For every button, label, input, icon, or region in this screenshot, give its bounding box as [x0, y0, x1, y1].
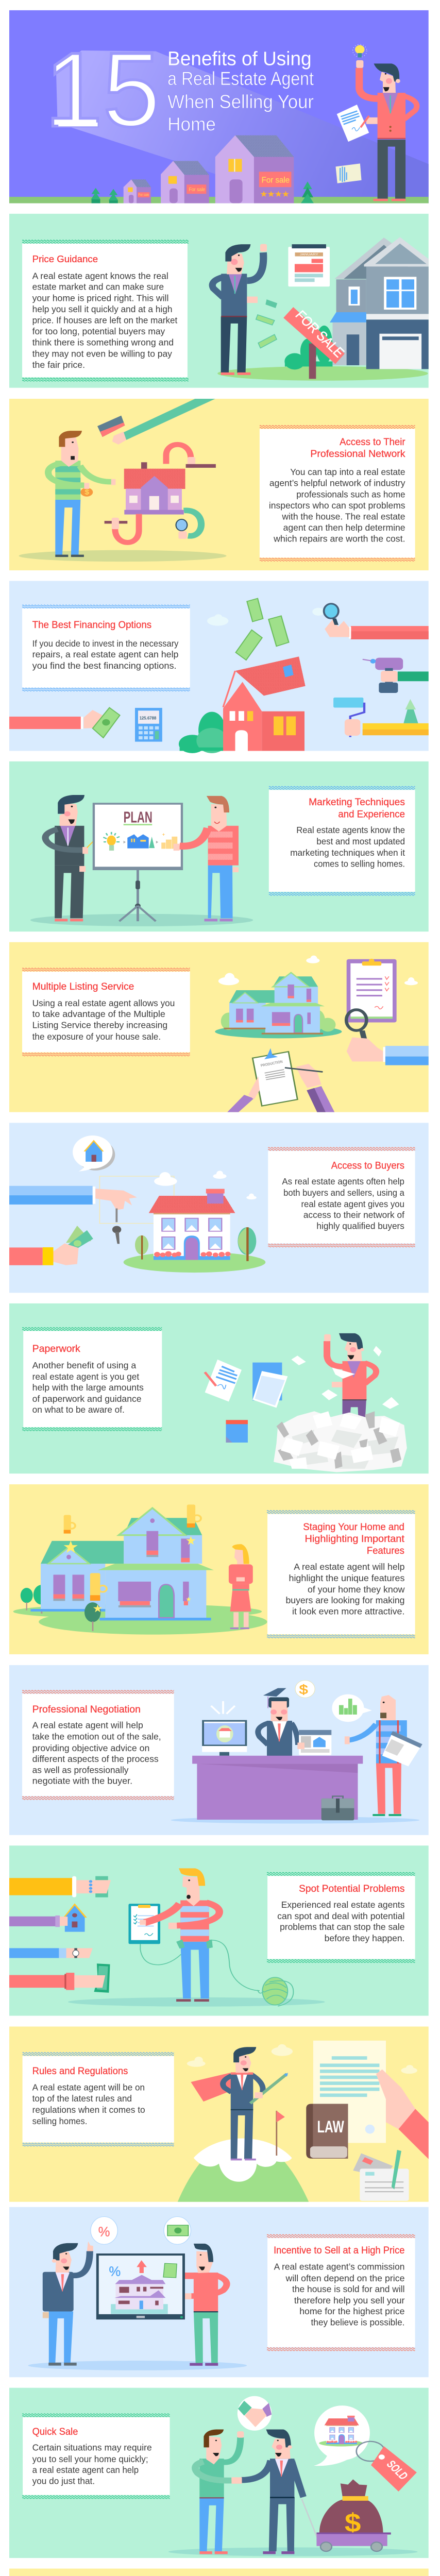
hands signing document: [227, 1048, 334, 1112]
hand with cash: [9, 708, 120, 738]
character: client with newspaper: [345, 1695, 422, 1815]
falling money: [236, 598, 289, 660]
panel: incentive to sell at a high price: [9, 2207, 429, 2377]
percent bubble: [91, 2217, 117, 2244]
clipboard: [128, 1904, 160, 1944]
text box: agent can then help determine: [283, 523, 405, 533]
money: [256, 299, 277, 348]
law document: [313, 2041, 386, 2143]
panel: best financing options: [9, 581, 429, 753]
text box: regulations when it comes to: [32, 2105, 145, 2115]
text box: Highlighting Important: [305, 1533, 404, 1545]
shadow: [28, 2361, 247, 2370]
hand with key: [9, 1186, 137, 1244]
text box: of paperwork and guidance: [32, 1394, 142, 1404]
character: agent with document: [335, 60, 417, 200]
text box: A real estate agent will help: [294, 1562, 404, 1572]
house: [330, 237, 429, 369]
text box: think there is something wrong and: [32, 337, 174, 347]
text box: for too long, potential buyers may: [32, 326, 165, 336]
text box: Staging Your Home and: [303, 1521, 404, 1532]
text box: they may not even be willing to pay: [32, 348, 173, 359]
text box: A real estate agent will be on: [32, 2082, 145, 2093]
hands signing document: PRODUCTION: [260, 1059, 283, 1067]
display frame with mansion: %: [109, 2264, 121, 2279]
text box: help you sell it quickly and at a high: [32, 304, 172, 314]
text box: and Experience: [338, 808, 405, 820]
panel: header: [9, 10, 429, 204]
shadow: [68, 1997, 325, 2007]
text box: will often depend on the price: [285, 2274, 404, 2284]
text box: [267, 1872, 415, 1963]
calendar: JANUARY: [300, 253, 318, 256]
character: agent presenting: [45, 795, 105, 920]
text box: Using a real estate agent allows you: [32, 998, 175, 1008]
handshake bubble: [238, 2396, 272, 2431]
text box: your home is priced right. This will: [32, 293, 168, 303]
hand with magnifier: [324, 604, 429, 639]
text box: selling homes.: [32, 2116, 87, 2126]
text box: A real estate agent will help: [32, 1720, 143, 1731]
calendar: [288, 244, 330, 286]
text box: inspectors who can spot problems: [269, 501, 405, 511]
for sale sign: FOR SALE: [292, 308, 348, 360]
text box: negotiate with the buyer.: [32, 1776, 132, 1786]
title: Home: [167, 114, 216, 135]
text box: it look even more attractive.: [292, 1606, 404, 1617]
ok hand gestures: [64, 1504, 201, 1601]
clouds: [218, 956, 418, 985]
text box: [22, 240, 189, 381]
text box: Access to Buyers: [331, 1159, 404, 1171]
text box: Paperwork: [32, 1343, 80, 1354]
panel: professional negotiation: [9, 1665, 429, 1835]
money bag on cart: $: [345, 2508, 361, 2538]
text box: [23, 2052, 174, 2147]
title: a Real Estate Agent: [167, 69, 314, 90]
character: left agent: [43, 2241, 93, 2364]
calendar page: [226, 1420, 248, 1443]
lawn: [13, 1604, 267, 1635]
text box: you to sell your home quickly;: [32, 2454, 148, 2464]
text box: [22, 968, 190, 1057]
sparkle stars: [64, 1536, 196, 1612]
clouds: [207, 608, 325, 626]
text box: Real estate agents know the: [296, 825, 405, 836]
hand with cash: [9, 1876, 111, 1897]
large house: [215, 135, 294, 204]
law book: [306, 2104, 348, 2159]
text box: [22, 2413, 170, 2499]
small house: For sale: [139, 193, 149, 197]
text box: of your home they know: [308, 1585, 405, 1595]
text box: Spot Potential Problems: [299, 1883, 404, 1894]
law book: LAW: [317, 2117, 344, 2136]
ground shadow: [30, 914, 253, 926]
text box: to take advantage of the Multiple: [32, 1009, 165, 1019]
text box: problems that can stop the sale: [280, 1922, 404, 1933]
text box: [22, 1690, 174, 1800]
bushes: [284, 326, 332, 369]
display frame with mansion: [96, 2253, 185, 2319]
tangled wire: [140, 1940, 293, 2006]
text box: the house is sold for and will: [292, 2284, 404, 2294]
text box: As real estate agents often help: [282, 1177, 404, 1187]
text box: Experienced real estate agents: [281, 1900, 404, 1910]
hand with magnifier: [346, 1010, 429, 1065]
signed document: [205, 1360, 242, 1401]
flying papers: [291, 1346, 399, 1409]
house with lifted roof: [179, 656, 306, 753]
dollar bubble: $: [299, 1683, 308, 1697]
clipboard: [347, 959, 397, 1023]
text box: buyers are looking for making: [286, 1596, 404, 1605]
panel: access to buyers: [9, 1123, 429, 1293]
text box: a real estate agent can help: [32, 2465, 139, 2475]
panel: paperwork: [9, 1303, 429, 1473]
text box: highlight the unique features: [289, 1573, 404, 1583]
text box: price. If houses are left on the market: [32, 315, 177, 325]
text box: home for the highest price: [299, 2307, 404, 2316]
text box: on what to be aware of.: [32, 1405, 125, 1415]
text box: Another benefit of using a: [32, 1361, 136, 1370]
text box: with the house. The real estate: [282, 512, 405, 522]
character: right agent: [231, 2430, 317, 2553]
text box: real estate agent gives you: [301, 1199, 404, 1209]
character: agent: [212, 244, 267, 374]
for sale sign: [283, 307, 348, 379]
text box: before they happen.: [325, 1934, 404, 1943]
text box: best and most updated: [316, 837, 405, 846]
text box: they believe is possible.: [311, 2317, 404, 2328]
plan board: [93, 803, 183, 921]
ground shadow: [19, 550, 227, 562]
text box: Multiple Listing Service: [32, 980, 134, 992]
text box: The Best Financing Options: [32, 619, 151, 631]
panel: spot potential problems: [9, 1845, 429, 2016]
text box: A real estate agent knows the real: [32, 270, 168, 281]
computer monitor: [202, 1701, 247, 1756]
text box: take the emotion out of the sale,: [32, 1732, 161, 1742]
character: client: [174, 796, 239, 920]
calculator: [135, 708, 162, 742]
text box: [22, 605, 190, 691]
house on lawn: [124, 1189, 265, 1273]
clouds: [187, 2044, 417, 2074]
text box: you find the best financing options.: [32, 661, 177, 671]
text box: help with the large amounts: [32, 1383, 144, 1393]
text box: therefore help you sell your: [294, 2296, 405, 2306]
tablet listing: [297, 1730, 331, 1755]
panel: access to professional network: [9, 399, 429, 570]
text box: [260, 425, 415, 562]
text box: [269, 786, 415, 896]
panel: professional handling: [9, 2569, 429, 2576]
text box: Certain situations may require: [32, 2443, 152, 2453]
paper pile: [274, 1411, 407, 1472]
character: left client: [195, 2430, 244, 2553]
money bag on cart: [316, 2479, 391, 2551]
chart bubble: [332, 1694, 372, 1722]
text box: Quick Sale: [32, 2426, 78, 2437]
text box: as well as professionally: [32, 1766, 129, 1775]
text box: Access to Their: [340, 436, 405, 448]
text box: estate market and can make sure: [32, 281, 164, 292]
hand with drill: [363, 658, 429, 693]
text box: professionals such as home: [296, 489, 405, 500]
text box: agent’s helpful network of industry: [269, 478, 405, 488]
blue notebook: [252, 1363, 287, 1408]
text box: real estate agent is you get: [32, 1372, 140, 1382]
icon: light bulb: [353, 44, 367, 57]
text box: comes to selling homes.: [314, 859, 405, 869]
arm with paint brush: [97, 399, 215, 445]
speech bubble with house: [73, 1136, 115, 1172]
text box: A real estate agent’s commission: [274, 2262, 404, 2272]
ground: [217, 366, 428, 381]
text box: highly qualified buyers: [316, 1221, 404, 1231]
text box: different aspects of the process: [32, 1754, 159, 1764]
text box: repairs, a real estate agent can help: [32, 650, 178, 660]
staged house: [21, 1508, 214, 1631]
text box: Features: [367, 1545, 404, 1556]
title number 15: 15: [45, 30, 161, 149]
character: right agent: [183, 2244, 227, 2364]
briefcase: [321, 1796, 354, 1820]
text box: both buyers and sellers, using a: [283, 1188, 404, 1198]
character: superhero agent: [191, 2047, 288, 2160]
character: agent in paper pile: [324, 1333, 376, 1425]
text box: Price Guidance: [32, 255, 98, 265]
hand holding paper: [376, 2070, 429, 2159]
character: woman: [229, 1544, 253, 1629]
flag: [276, 2111, 285, 2156]
shadow: [171, 1817, 419, 1824]
panel: multiple listing service: [9, 942, 429, 1112]
desk: [192, 1756, 363, 1820]
hand with banknote: [9, 1963, 110, 1993]
text box: [267, 1510, 415, 1638]
sold tag: [357, 2442, 417, 2492]
text box: If you decide to invest in the necessary: [32, 639, 179, 649]
text box: providing objective advice on: [32, 1743, 149, 1753]
panel: price guidance: [9, 214, 429, 388]
title: Benefits of Using: [167, 48, 312, 70]
text box: marketing techniques when it: [290, 848, 405, 858]
text box: Rules and Regulations: [32, 2065, 128, 2076]
calculator: 125.6788: [140, 716, 156, 721]
house with workers: [105, 445, 216, 543]
percent bubble: %: [98, 2225, 110, 2240]
text box: which repairs are worth the cost.: [273, 534, 405, 544]
text box: [268, 1147, 415, 1247]
text box: Professional Negotiation: [32, 1703, 141, 1715]
title: [167, 48, 314, 135]
text box: you do just that.: [32, 2477, 95, 2486]
text box: access to their network of: [303, 1210, 404, 1220]
text box: [267, 2234, 415, 2351]
money bubble: [164, 2217, 191, 2244]
character: man with clipboard: [140, 1868, 219, 2001]
panel: staging your home: [9, 1484, 429, 1654]
panel: rules and regulations: [9, 2027, 429, 2202]
panel: marketing techniques: [9, 761, 429, 931]
text box: can spot and deal with potential: [277, 1911, 404, 1922]
trees: [91, 181, 314, 204]
house on island: [215, 973, 342, 1038]
sold tag: SOLD: [384, 2458, 411, 2482]
plan board: +: [162, 833, 165, 838]
icon: money bag: [80, 483, 93, 497]
hand with roller: [333, 698, 429, 737]
text box: Listing Service thereby increasing: [32, 1020, 167, 1030]
text box: the exposure of your house sale.: [32, 1032, 161, 1042]
form and pen: [353, 2150, 409, 2201]
dollar bubble: [295, 1680, 315, 1698]
text box: top of the latest rules and: [32, 2094, 132, 2104]
large house: For sale: [262, 175, 290, 185]
text box: [22, 1327, 162, 1431]
shadow: [168, 2548, 418, 2556]
plan board: PLAN: [124, 809, 153, 826]
small house: [124, 179, 151, 204]
panel: quick sale: [9, 2388, 429, 2558]
text box: the fair price.: [32, 360, 85, 370]
hand with house: [9, 1903, 87, 1932]
text box: Professional Network: [310, 448, 405, 459]
icon: money bag: $: [84, 488, 89, 496]
character: homeowner: [48, 431, 115, 556]
medium house: [161, 161, 209, 204]
medium house: For sale: [189, 188, 205, 193]
hand with watch: [9, 1948, 93, 1958]
title: When Selling Your: [167, 92, 314, 113]
speech bubble with house: [314, 2405, 370, 2466]
hand with money: [9, 1226, 93, 1265]
character: graduate agent: [258, 1688, 298, 1756]
clouds and frame: [99, 1171, 257, 1224]
text box: Marketing Techniques: [309, 796, 405, 808]
mountain: [178, 2138, 309, 2202]
text box: You can tap into a real estate: [290, 467, 405, 478]
